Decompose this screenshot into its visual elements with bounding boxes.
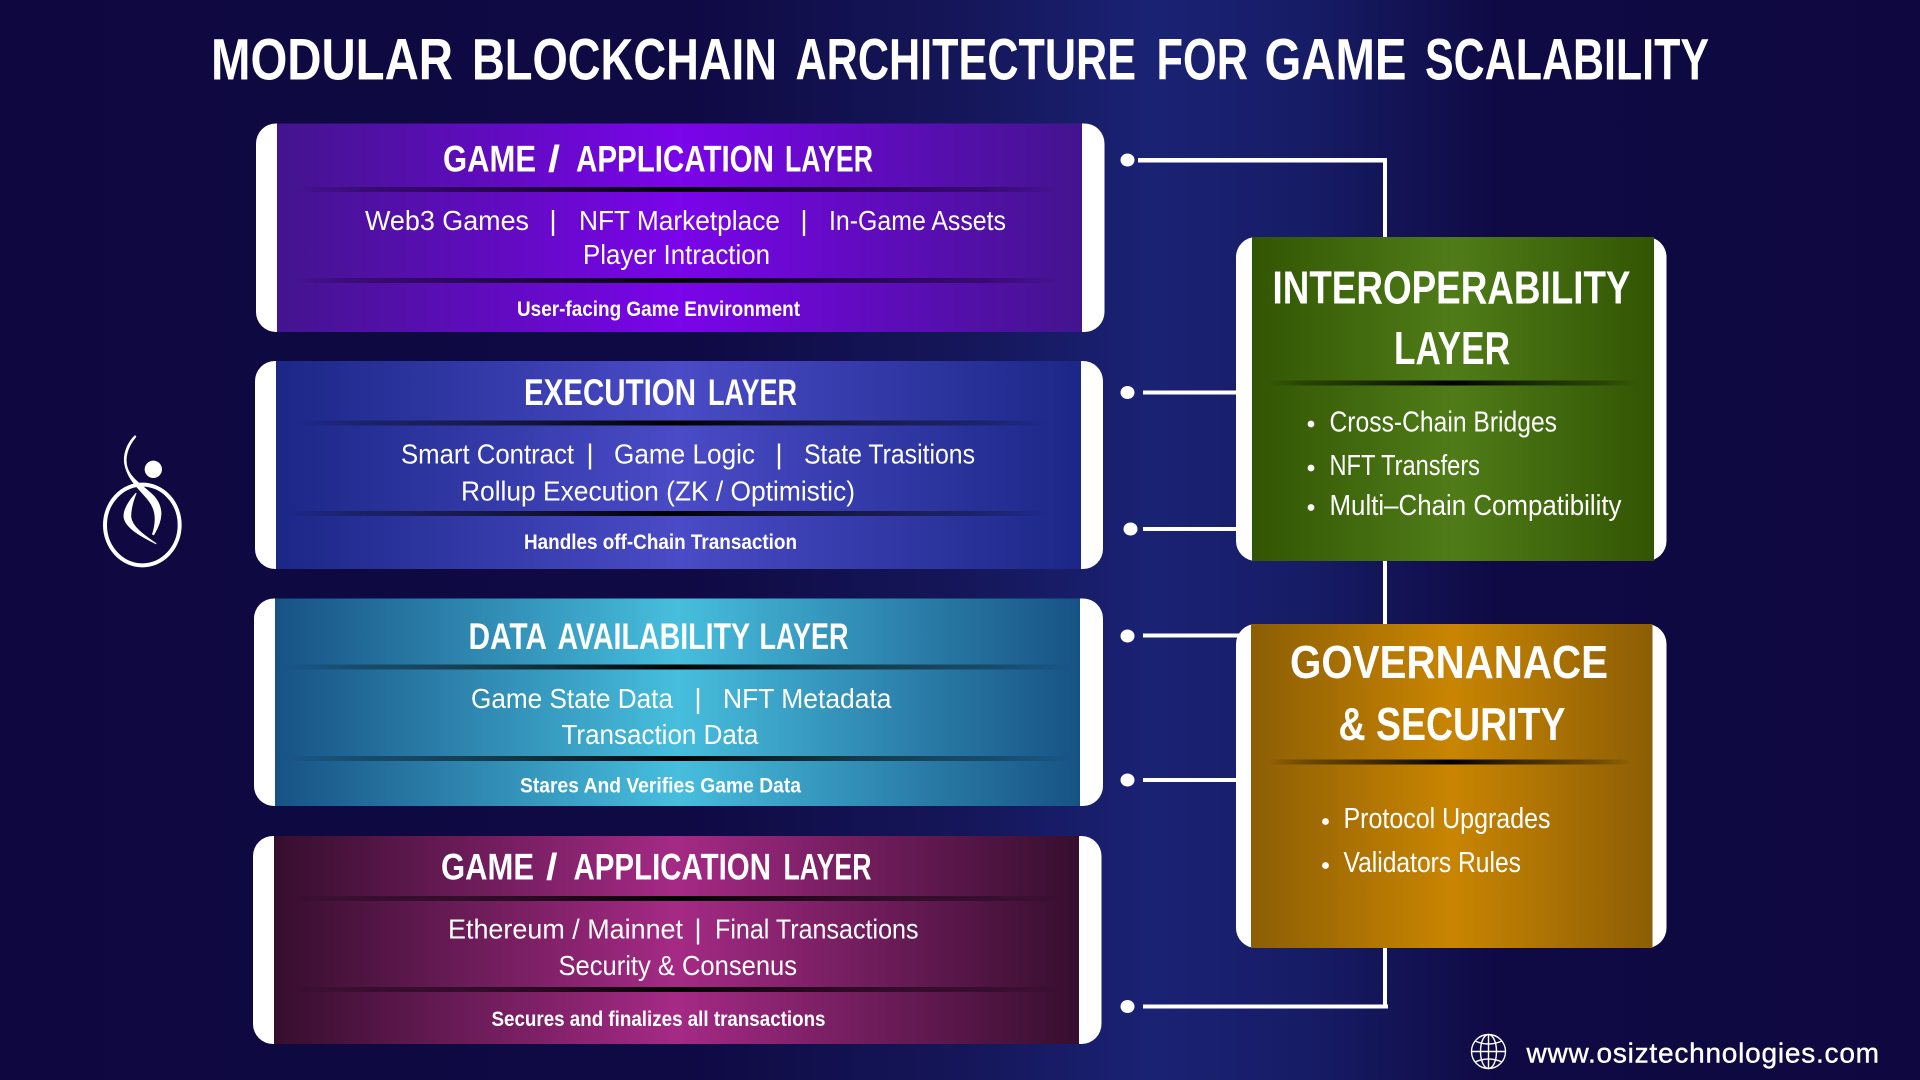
caption: User-facing Game Environment [517, 298, 800, 321]
caption: Handles off-Chain Transaction [524, 531, 797, 554]
icon: globe [1472, 1034, 1506, 1068]
items [365, 205, 1006, 270]
bullet list: Cross-Chain Bridges [1330, 406, 1557, 438]
heading: APPLICATION [576, 138, 774, 180]
heading: & SECURITY [1338, 698, 1566, 750]
items: Final Transactions [715, 914, 918, 944]
heading [468, 616, 848, 657]
heading: DATA [468, 616, 547, 657]
items [401, 438, 975, 506]
panel: data availability layer [254, 598, 1103, 806]
caption: Secures and finalizes all transactions [492, 1008, 826, 1031]
panel: settlement layer [253, 836, 1102, 1044]
bullet list: Validators Rules [1344, 847, 1521, 879]
connector: execution layer top [1120, 386, 1237, 399]
heading: APPLICATION [574, 846, 771, 888]
items: Player Intraction [583, 239, 770, 270]
items: NFT Metadata [723, 683, 892, 714]
title [211, 28, 1709, 92]
panel background [1236, 237, 1666, 561]
panel: game application layer [256, 124, 1104, 332]
items: | [694, 914, 702, 944]
heading: GAME [441, 846, 534, 888]
heading: LAYER [784, 846, 872, 888]
bullet list [1322, 803, 1550, 879]
bullet list [1308, 406, 1622, 522]
items: Smart Contract [401, 438, 574, 470]
heading: LAYER [708, 372, 797, 413]
items: | [800, 205, 808, 236]
heading [1290, 636, 1608, 750]
heading: GOVERNANACE [1290, 636, 1608, 688]
panel: execution layer [255, 361, 1103, 569]
items [448, 914, 918, 981]
items: Transaction Data [562, 719, 759, 750]
icon: company logo [105, 437, 180, 565]
connector: data layer top [1120, 630, 1241, 642]
connector: settlement layer to governance [1120, 947, 1388, 1013]
title: GAME [1264, 28, 1406, 92]
heading: LAYER [760, 616, 848, 657]
panel background [256, 124, 1104, 332]
items [471, 683, 892, 750]
items: State Trasitions [804, 438, 975, 470]
items: Web3 Games [365, 205, 529, 236]
caption: Stares And Verifies Game Data [520, 774, 801, 798]
items: Game Logic [614, 438, 755, 470]
panel background [254, 598, 1103, 806]
heading: / [548, 138, 560, 180]
heading: LAYER [1394, 322, 1510, 374]
bullet list: Multi–Chain Compatibility [1330, 490, 1622, 522]
heading: GAME [443, 138, 536, 180]
heading [443, 138, 873, 180]
heading [441, 846, 872, 888]
items: Ethereum / Mainnet [448, 914, 683, 944]
items: NFT Marketplace [579, 205, 780, 236]
panel background [253, 836, 1102, 1044]
website url: www.osiztechnologies.com [1526, 1038, 1879, 1068]
items: | [586, 438, 594, 470]
title: ARCHITECTURE [796, 28, 1136, 92]
connector: game layer to interoperability [1120, 154, 1387, 238]
connector: execution layer bottom [1124, 522, 1237, 536]
heading: LAYER [785, 138, 873, 180]
website footer [1472, 1034, 1879, 1068]
title: BLOCKCHAIN [472, 28, 777, 92]
connector: data layer bottom [1120, 774, 1237, 786]
heading [1272, 262, 1630, 374]
heading: EXECUTION [524, 372, 696, 413]
items: Rollup Execution (ZK / Optimistic) [461, 476, 855, 506]
items: | [694, 683, 702, 714]
bullet list: NFT Transfers [1330, 450, 1480, 482]
title: MODULAR [211, 28, 453, 92]
items: | [775, 438, 783, 470]
items: In-Game Assets [829, 205, 1006, 236]
heading: AVAILABILITY [558, 616, 750, 657]
title: FOR [1156, 28, 1248, 92]
bullet list: Protocol Upgrades [1344, 803, 1550, 835]
panel background [1236, 624, 1666, 948]
panel background [255, 361, 1103, 569]
items: Security & Consenus [558, 950, 797, 981]
panel: interoperability layer [1236, 237, 1666, 561]
items: | [549, 205, 557, 236]
items: Game State Data [471, 683, 673, 714]
heading: INTEROPERABILITY [1272, 262, 1630, 314]
title: SCALABILITY [1425, 28, 1709, 92]
heading: / [546, 846, 558, 888]
panel: governance and security [1236, 624, 1666, 948]
connectors: lines and dots between layers [1120, 154, 1388, 1013]
connector: between right panels [1383, 560, 1387, 625]
